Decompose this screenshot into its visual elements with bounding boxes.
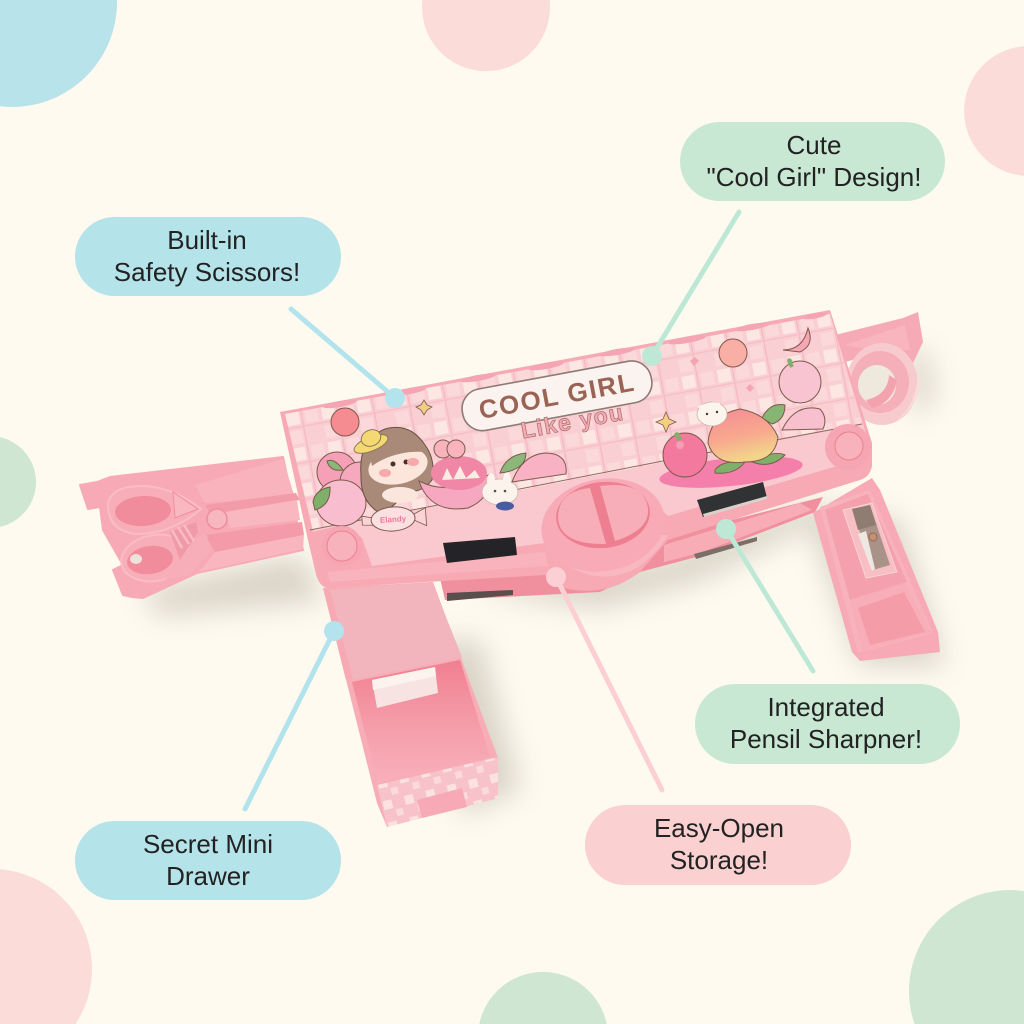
callout: scissors: Built-in xyxy=(167,225,247,255)
art: big peach and cat xyxy=(658,402,804,493)
badge: COOL GIRL xyxy=(459,358,655,434)
magnet clasp right xyxy=(697,482,767,517)
lower face edge line xyxy=(310,424,862,530)
badge: COOL GIRL: COOL GIRL xyxy=(476,367,638,425)
center push buttons xyxy=(534,469,672,581)
soft drop shadows xyxy=(140,350,945,815)
art: middle peach xyxy=(500,453,566,482)
callout: mini drawer xyxy=(75,821,341,900)
corner button right xyxy=(825,424,871,470)
callout: scissors: Safety Scissors! xyxy=(114,257,300,287)
decorative circle: blue top-left xyxy=(0,0,117,107)
plaid print xyxy=(285,314,862,530)
art: shaved ice bowl xyxy=(419,440,490,509)
callout: mini drawer: Drawer xyxy=(166,861,250,891)
sharpener drawer xyxy=(813,478,940,661)
art: left peaches xyxy=(313,408,380,526)
decorative circle: pink right xyxy=(964,46,1024,176)
leader: sharpener xyxy=(716,519,813,671)
icon: scissors handles xyxy=(108,486,227,587)
decorative circle: green bottom-right xyxy=(909,890,1024,1024)
corner button left xyxy=(322,526,362,566)
leader: drawer xyxy=(245,621,344,809)
mini drawer xyxy=(323,582,498,827)
callout: storage: Easy-Open xyxy=(654,813,784,843)
callout: sharpener: Pensil Sharpner! xyxy=(730,724,922,754)
art: right fruit xyxy=(690,328,825,430)
art: girl with hat xyxy=(352,427,433,512)
callout: cool girl design: "Cool Girl" Design! xyxy=(707,162,921,192)
scissors tray xyxy=(80,457,304,598)
callout: cool girl design: Cute xyxy=(787,130,841,160)
callout: storage xyxy=(585,805,851,885)
case body rim xyxy=(280,310,872,591)
callout: mini drawer: Secret Mini xyxy=(143,829,273,859)
drawer front plaid xyxy=(377,757,498,827)
icon: sharpener blade xyxy=(843,503,897,578)
sparkle star right xyxy=(656,412,676,432)
text: Like you: Like you xyxy=(519,399,626,443)
decorative circle: pink bottom-left xyxy=(0,869,92,1024)
scalloped top edge xyxy=(323,311,827,410)
art: bunny xyxy=(482,472,518,510)
leader: scissors xyxy=(291,309,405,408)
callout: scissors xyxy=(75,217,341,296)
art: candy: Elandy xyxy=(380,514,407,525)
decorative circle: green bottom xyxy=(479,972,607,1024)
decorative circle: green left xyxy=(0,437,36,527)
decorative circle: pink top xyxy=(422,0,550,71)
eraser xyxy=(372,667,438,708)
tape holder xyxy=(835,312,923,425)
drawer pull tab xyxy=(417,788,467,818)
magnet clasp left xyxy=(443,537,517,563)
art: candy xyxy=(361,505,427,533)
under layer with metal strips xyxy=(440,497,823,601)
callout: storage: Storage! xyxy=(670,845,768,875)
sparkle star left xyxy=(416,400,432,415)
top face xyxy=(285,311,868,566)
leader: design xyxy=(642,212,739,366)
drawer lid xyxy=(330,582,462,680)
product: pencil case xyxy=(80,310,945,827)
callout: sharpener: Integrated xyxy=(767,692,885,722)
callout: cool girl design xyxy=(680,122,945,201)
callout: sharpener xyxy=(695,684,960,764)
leader: storage xyxy=(546,567,662,790)
